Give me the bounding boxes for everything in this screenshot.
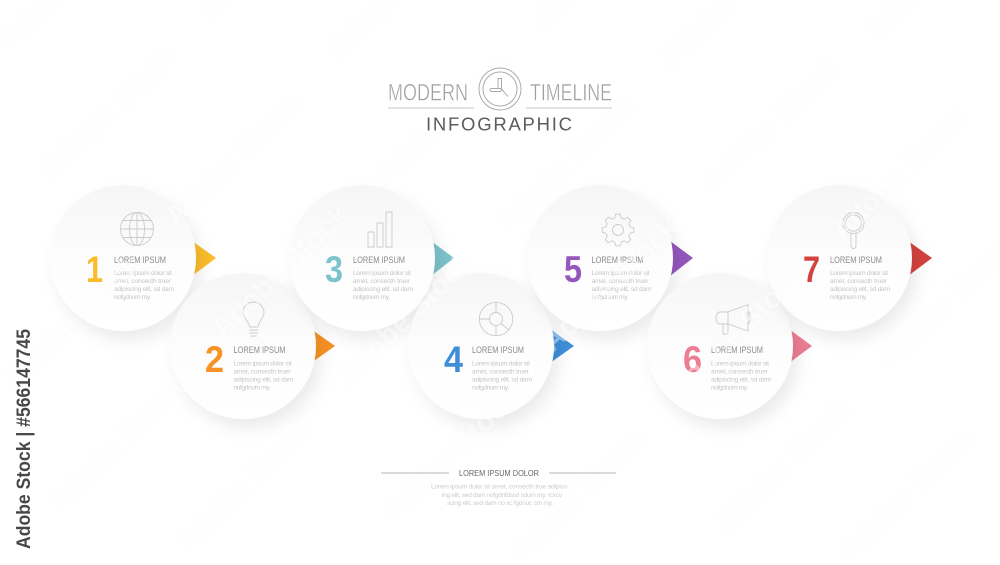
step 3 panel: LOREM IPSUM (353, 255, 405, 265)
step 1 panel: amet, consecth truer (114, 278, 172, 285)
step 7 panel: Lorem ipsum dolor sit (830, 270, 888, 277)
step 6 panel: amet, consecth truer (711, 368, 769, 376)
step 2 panel (170, 273, 335, 419)
step 4 panel: Lorem ipsum dolor sit (472, 360, 530, 368)
side credit: Adobe Stock number: Adobe Stock | #566147745 (14, 329, 35, 549)
watermark: repeated Adobe Stock: Adobe Stock (710, 391, 860, 538)
step 1 panel: 1 (86, 249, 103, 290)
icon: globe (120, 212, 154, 246)
watermark: repeated Adobe Stock: Adobe Stock (206, 198, 356, 345)
step 1 panel: nofgdnum my. (114, 294, 151, 301)
step 5 panel: adipiscing elit, sd dam (592, 286, 652, 293)
step 4 panel: adipiscing elit, sd dam (472, 376, 532, 384)
footer text block: ing elit, sed dam nofgdnfdssd sdum my. rcxcv (442, 492, 563, 499)
step 3 panel: adipiscing elit, sd dam (353, 286, 414, 293)
step 3 panel: 3 (325, 249, 343, 290)
step 7 panel (766, 185, 932, 331)
step 7 panel: amet, consecth truer (830, 278, 888, 285)
step 6 panel: adipiscing elit, sd dam (711, 376, 772, 384)
watermark: repeated Adobe Stock: Adobe Stock (376, 381, 526, 528)
watermark: repeated Adobe Stock: Adobe Stock (43, 371, 193, 518)
step 5 panel: nofgdnum my. (592, 294, 629, 301)
step 2 panel: 2 (205, 339, 224, 380)
title: Modern Timeline Infographic: TIMELINE (530, 80, 612, 106)
footer text block (381, 468, 616, 507)
step 6 panel: Lorem ipsum dolor sit (711, 360, 769, 368)
watermark: repeated Adobe Stock: Adobe Stock (368, 45, 518, 192)
icon: bar chart (368, 212, 392, 247)
step 1 panel: Lorem ipsum dolor sit (114, 270, 172, 277)
watermark: repeated Adobe Stock: Adobe Stock (331, 245, 481, 392)
step 7 panel: adipiscing elit, sd dam (830, 286, 890, 293)
step 1 panel: LOREM IPSUM (114, 255, 166, 265)
watermark: repeated Adobe Stock: Adobe Stock (503, 421, 653, 565)
step 2 panel: LOREM IPSUM (234, 345, 286, 355)
step 4 panel: LOREM IPSUM (472, 345, 524, 355)
icon: megaphone (716, 304, 750, 334)
watermark: repeated Adobe Stock: Adobe Stock (826, 100, 976, 247)
step 3 panel (289, 185, 454, 331)
step 1 panel (50, 185, 216, 331)
step 7 panel: 7 (803, 249, 820, 290)
step 4 panel: amet, consecth truer (472, 368, 530, 376)
step 5 panel: amet, consecth truer (592, 278, 649, 285)
icon: light bulb (243, 302, 264, 336)
footer text block: scing elit, sed dam no xc fgdnuc cm my. (447, 500, 553, 507)
step 5 panel: 5 (564, 249, 582, 290)
step 2 panel: adipiscing elit, sd dam (234, 376, 294, 384)
step 4 panel: 4 (444, 339, 463, 380)
watermark: repeated Adobe Stock: Adobe Stock (170, 411, 320, 558)
step 3 panel: nofgdnum my. (353, 294, 390, 301)
step 6 panel (647, 273, 812, 419)
title: Modern Timeline Infographic: MODERN (388, 80, 468, 106)
step 4 panel (408, 273, 574, 419)
step 2 panel: nofgdnum my. (234, 384, 271, 392)
icon: donut chart (479, 302, 513, 336)
step 4 panel: nofgdnum my. (472, 384, 509, 392)
step 3 panel: Lorem ipsum dolor sit (353, 270, 411, 277)
watermark: repeated Adobe Stock: Adobe Stock (491, 90, 641, 237)
watermark: repeated Adobe Stock: Adobe Stock (159, 85, 309, 232)
watermark: repeated Adobe Stock: Adobe Stock (833, 421, 983, 565)
step 5 panel (527, 185, 693, 331)
title: Modern Timeline Infographic: INFOGRAPHIC (426, 114, 572, 134)
watermark: repeated Adobe Stock: Adobe Stock (0, 248, 148, 395)
watermark: repeated Adobe Stock: Adobe Stock (35, 38, 185, 185)
icon: magnifier (843, 212, 864, 248)
step 2 panel: amet, consecth truer (234, 368, 291, 376)
step 6 panel: LOREM IPSUM (711, 345, 763, 355)
footer text block: LOREM IPSUM DOLOR (459, 468, 539, 478)
watermark: repeated Adobe Stock: Adobe Stock (696, 50, 846, 197)
step 5 panel: Lorem ipsum dolor sit (592, 270, 650, 277)
icon: gear (602, 214, 634, 246)
title: Modern Timeline Infographic (388, 68, 612, 134)
step 6 panel: 6 (683, 339, 702, 380)
step 7 panel: LOREM IPSUM (830, 255, 882, 265)
footer text block: Lorem ipsum dolor sit amet, consecth true adipisc- (431, 484, 569, 490)
step 2 panel: Lorem ipsum dolor sit (234, 360, 292, 368)
watermark: repeated Adobe Stock: Adobe Stock (536, 211, 686, 358)
step 7 panel: nofgdnum my. (830, 294, 867, 301)
step 3 panel: amet, consecth truer (353, 278, 411, 285)
watermark: repeated Adobe Stock: Adobe Stock (663, 258, 813, 405)
step 5 panel: LOREM IPSUM (592, 255, 644, 265)
step 6 panel: nofgdnum my. (711, 384, 748, 392)
step 1 panel: adipiscing elit, sd dam (114, 286, 174, 293)
